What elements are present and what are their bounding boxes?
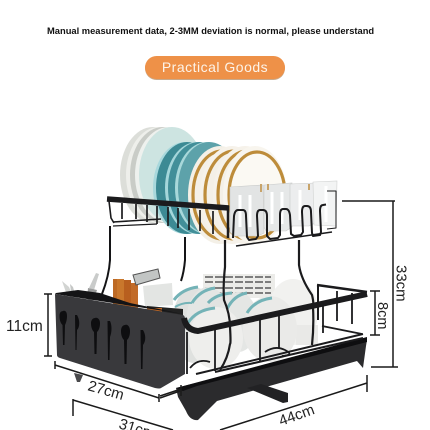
lower dishes and glasses	[172, 274, 318, 369]
glasses	[230, 181, 337, 236]
label: 8cm: 8cm	[374, 302, 390, 329]
label: 11cm: 11cm	[6, 318, 43, 335]
note text: Manual measurement data, 2-3MM deviation is normal, please understand	[47, 26, 374, 36]
utensil caddy	[55, 290, 185, 388]
label: 33cm: 33cm	[392, 265, 410, 302]
lower rack wires	[184, 240, 367, 374]
caddy foot	[74, 373, 83, 382]
label: 44cm: 44cm	[277, 401, 317, 430]
upper rack	[107, 191, 336, 246]
button: Practical Goods	[145, 56, 285, 79]
plates	[120, 127, 287, 244]
dimension lines	[44, 201, 398, 430]
support wires	[102, 226, 185, 294]
lower rack base tray	[176, 337, 367, 420]
button: Practical Goods: Practical Goods	[162, 59, 268, 75]
label: 27cm: 27cm	[86, 378, 126, 404]
utensils	[62, 269, 183, 318]
